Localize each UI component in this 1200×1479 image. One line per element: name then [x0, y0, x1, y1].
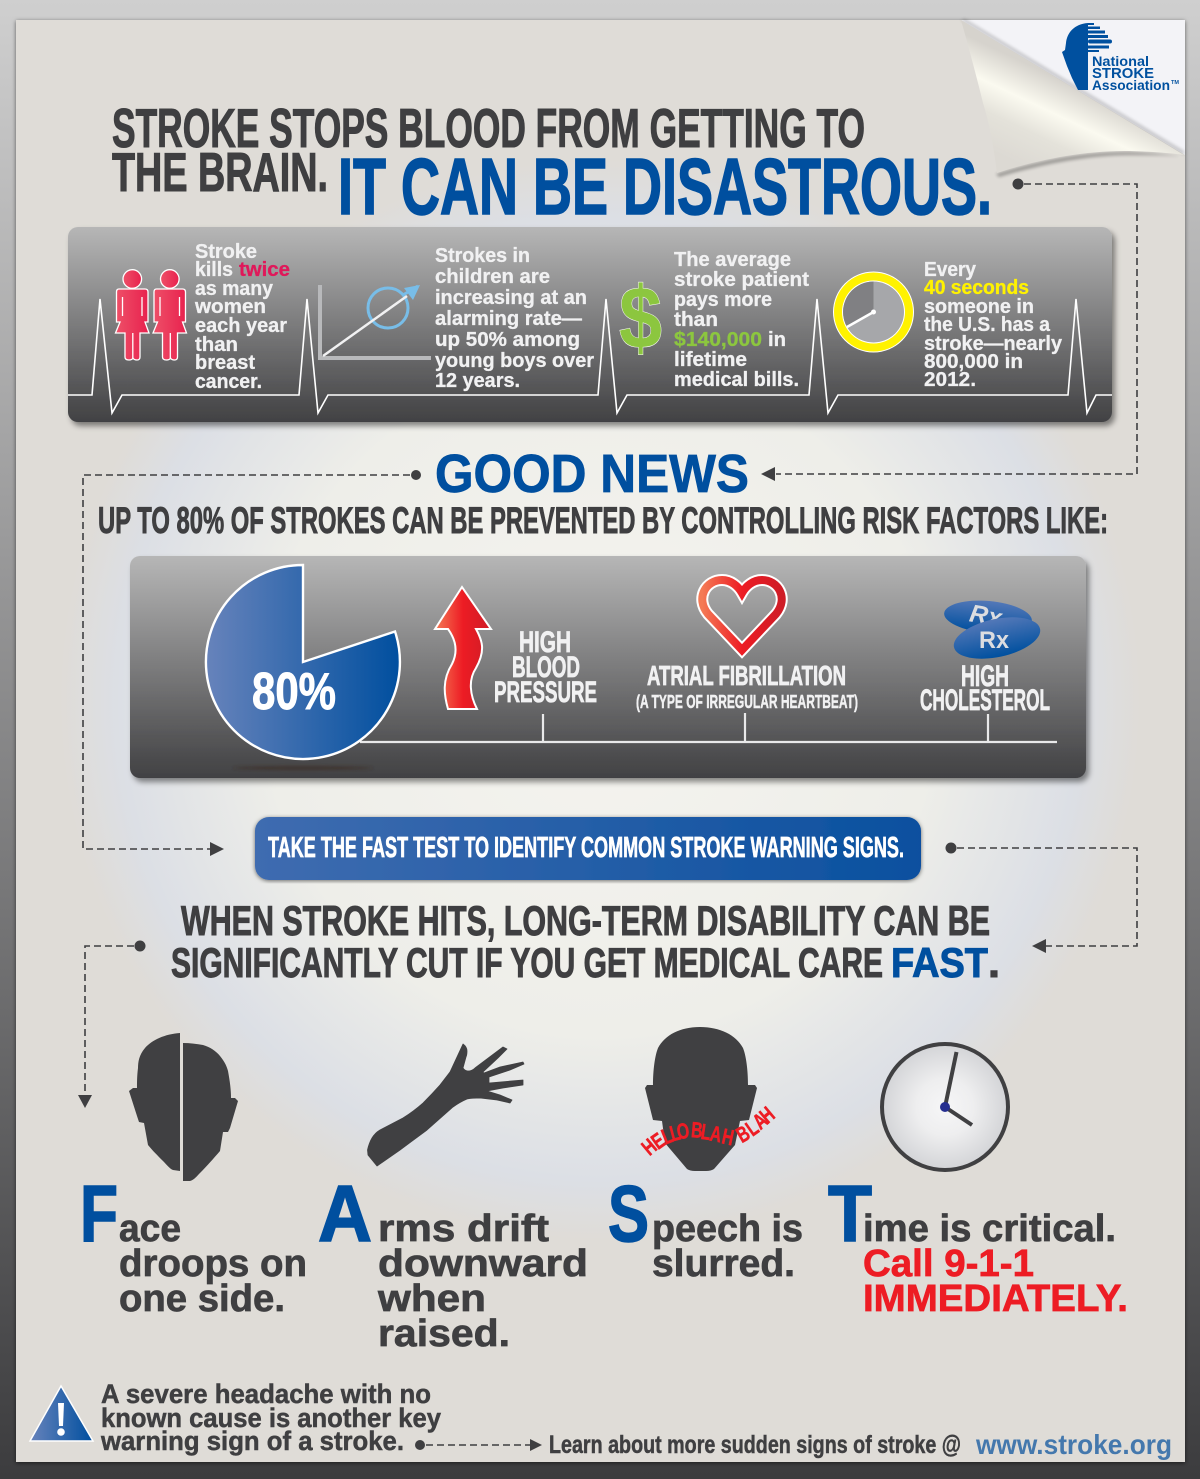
- text: Time: [828, 1169, 1128, 1320]
- pie chart: 80%: 80%: [252, 663, 336, 721]
- text: children statistic: [435, 245, 594, 392]
- icon: Rx pills: [943, 597, 1044, 666]
- text: cost statistic: lifetime: [674, 349, 747, 371]
- text: 40 seconds statistic: 800,000 in: [924, 351, 1023, 373]
- text: 40 seconds statistic: 2012.: [924, 369, 976, 391]
- icon: Rx pills: Rx: [979, 627, 1010, 654]
- curved words: HELLO BLAH BLAH: A: [749, 1109, 773, 1135]
- icon: rising chart with male symbol: [320, 285, 431, 358]
- icon: heart: [702, 580, 782, 650]
- curved words: HELLO BLAH BLAH: L: [742, 1116, 764, 1142]
- curved words: HELLO BLAH BLAH: A: [708, 1122, 724, 1148]
- text: women statistic: women: [194, 296, 266, 318]
- text: women statistic: Stroke: [195, 241, 257, 263]
- text: 40 seconds statistic: [924, 259, 1063, 391]
- icon: two women: [116, 270, 186, 360]
- label: high blood pressure: [494, 626, 597, 709]
- text: 40 seconds statistic: the U.S. has a: [924, 314, 1051, 336]
- label: atrial fibrillation: ATRIAL FIBRILLATION: [647, 660, 846, 691]
- text: cost statistic: in: [768, 329, 786, 351]
- timeline: [360, 713, 1057, 742]
- text: cost statistic: stroke patient: [674, 269, 809, 291]
- text: 40 seconds statistic: stroke—nearly: [924, 333, 1063, 355]
- text: women statistic: each year: [195, 315, 287, 337]
- curved words: HELLO BLAH BLAH: O: [675, 1119, 691, 1145]
- dashed connector: paragraph to face: [78, 940, 146, 1108]
- text: children statistic: children are: [435, 266, 550, 288]
- logo: National Stroke Association: [1062, 23, 1179, 93]
- panel: stroke statistics: [68, 227, 1112, 422]
- panel: risk factors: [130, 556, 1086, 778]
- text: Arms: downward: [378, 1243, 588, 1285]
- text: Speech: S: [608, 1169, 649, 1258]
- text: Face: F: [80, 1169, 118, 1258]
- text: women statistic: as many: [195, 278, 274, 300]
- curved words: HELLO BLAH BLAH: H: [638, 1135, 662, 1161]
- text: Time: ime is critical.: [863, 1208, 1116, 1250]
- text: Arms: when: [377, 1278, 486, 1320]
- label: atrial fibrillation: (A TYPE OF IRREGULAR HEARTBEAT): [636, 692, 858, 712]
- text: women statistic: cancer.: [195, 371, 262, 393]
- heading: good news: GOOD NEWS: [435, 444, 749, 504]
- text: children statistic: 12 years.: [435, 370, 520, 392]
- text: Speech: peech is: [652, 1208, 803, 1250]
- text: Time: IMMEDIATELY.: [863, 1278, 1128, 1320]
- label: high blood pressure: HIGH: [519, 626, 571, 659]
- text: Arms: A: [318, 1169, 372, 1258]
- curved words: HELLO BLAH BLAH: E: [647, 1129, 670, 1155]
- text: Face: ace: [119, 1208, 181, 1250]
- text: children statistic: young boys over: [435, 350, 594, 372]
- dashed connector: good news to FAST button: [83, 470, 421, 856]
- icon: red up arrow: [435, 587, 491, 709]
- icon: warning triangle: [30, 1386, 93, 1441]
- dashed connector: title to good news: [761, 178, 1137, 481]
- icon: analog clock: [882, 1044, 1008, 1170]
- curved words: HELLO BLAH BLAH: B: [690, 1119, 704, 1144]
- logo: National Stroke Association: STROKE: [1092, 65, 1154, 82]
- text: cost statistic: than: [674, 309, 718, 331]
- text: Time: Call 9-1-1: [863, 1243, 1034, 1285]
- text: children statistic: increasing at an: [435, 287, 587, 309]
- icon: raised arm: [368, 1044, 524, 1166]
- heading: disability statement: .: [988, 939, 1000, 986]
- text: headache warning: [100, 1379, 441, 1456]
- text: women statistic: breast: [195, 352, 255, 374]
- text: children statistic: up 50% among: [435, 329, 580, 351]
- text: headache warning: known cause is another key: [101, 1403, 441, 1433]
- text: Face: [80, 1169, 307, 1320]
- text: learn more and website: Learn about more sudden signs of stroke @: [549, 1431, 961, 1459]
- label: high cholesterol: HIGH: [961, 660, 1009, 693]
- curved words: HELLO BLAH BLAH: [638, 1103, 780, 1161]
- text: Arms: rms drift: [378, 1208, 549, 1250]
- icon: dollar sign: $: [619, 268, 662, 367]
- heading: disability statement: SIGNIFICANTLY CUT IF YOU GET MEDICAL CARE: [171, 939, 883, 986]
- dashed arrow to learn more: [415, 1439, 542, 1451]
- text: cost statistic: $140,000: [674, 329, 762, 351]
- text: Face: one side.: [119, 1278, 285, 1320]
- text: women statistic: kills: [195, 259, 233, 281]
- curved words: HELLO BLAH BLAH: L: [668, 1121, 683, 1147]
- dashed connector: button to paragraph: [946, 842, 1137, 953]
- label: high cholesterol: [920, 660, 1050, 717]
- curved words: HELLO BLAH BLAH: H: [756, 1103, 780, 1129]
- heartbeat line: [68, 299, 1112, 413]
- logo: National Stroke Association: TM: [1171, 80, 1179, 86]
- icon: drooping face: [129, 1033, 238, 1181]
- text: cost statistic: medical bills.: [674, 369, 799, 391]
- logo: National Stroke Association: Association: [1092, 78, 1170, 93]
- curved words: HELLO BLAH BLAH: L: [699, 1121, 713, 1146]
- title: [112, 97, 992, 231]
- text: Face: droops on: [119, 1243, 307, 1285]
- text: women statistic: than: [195, 334, 238, 356]
- icon: head with slurred speech: [638, 1027, 780, 1171]
- label: high cholesterol: CHOLESTEROL: [920, 684, 1050, 717]
- text: cost statistic: [674, 249, 809, 391]
- label: atrial fibrillation: [636, 660, 858, 712]
- page curl corner with logo: [961, 19, 1185, 177]
- title: THE BRAIN.: [112, 141, 328, 203]
- text: cost statistic: The average: [674, 249, 791, 271]
- label: high blood pressure: PRESSURE: [494, 676, 597, 709]
- heading: disability statement: [171, 897, 1000, 986]
- text: 40 seconds statistic: Every: [924, 259, 977, 281]
- text: headache warning: warning sign of a stroke.: [100, 1426, 404, 1456]
- pie shadow: [233, 766, 373, 770]
- icon: Rx pills: Rx: [968, 599, 1005, 633]
- text: Time: T: [828, 1169, 872, 1258]
- curved words: HELLO BLAH BLAH: B: [733, 1122, 755, 1148]
- icon: yellow clock: [833, 272, 914, 352]
- curved words: HELLO BLAH BLAH: H: [720, 1125, 736, 1151]
- logo: National Stroke Association: National: [1092, 54, 1149, 69]
- text: 40 seconds statistic: someone in: [924, 296, 1034, 318]
- button: FAST test: [255, 817, 921, 880]
- curved words: HELLO BLAH BLAH: L: [658, 1124, 677, 1150]
- text: 40 seconds statistic: 40 seconds: [924, 277, 1029, 299]
- heading: disability statement: FAST: [891, 939, 988, 986]
- text: cost statistic: pays more: [674, 289, 772, 311]
- text: children statistic: alarming rate—: [435, 308, 582, 330]
- text: learn more and website: www.stroke.org: [975, 1429, 1172, 1460]
- text: women statistic: twice: [239, 259, 290, 281]
- text: Speech: slurred.: [652, 1243, 795, 1285]
- pie chart: 80%: [206, 565, 400, 759]
- text: Arms: [318, 1169, 588, 1355]
- text: Arms: raised.: [378, 1313, 510, 1355]
- text: headache warning: A severe headache with no: [101, 1379, 431, 1409]
- label: high blood pressure: BLOOD: [512, 651, 580, 684]
- text: women statistic: [194, 241, 290, 393]
- text: Speech: [608, 1169, 803, 1285]
- text: children statistic: Strokes in: [435, 245, 530, 267]
